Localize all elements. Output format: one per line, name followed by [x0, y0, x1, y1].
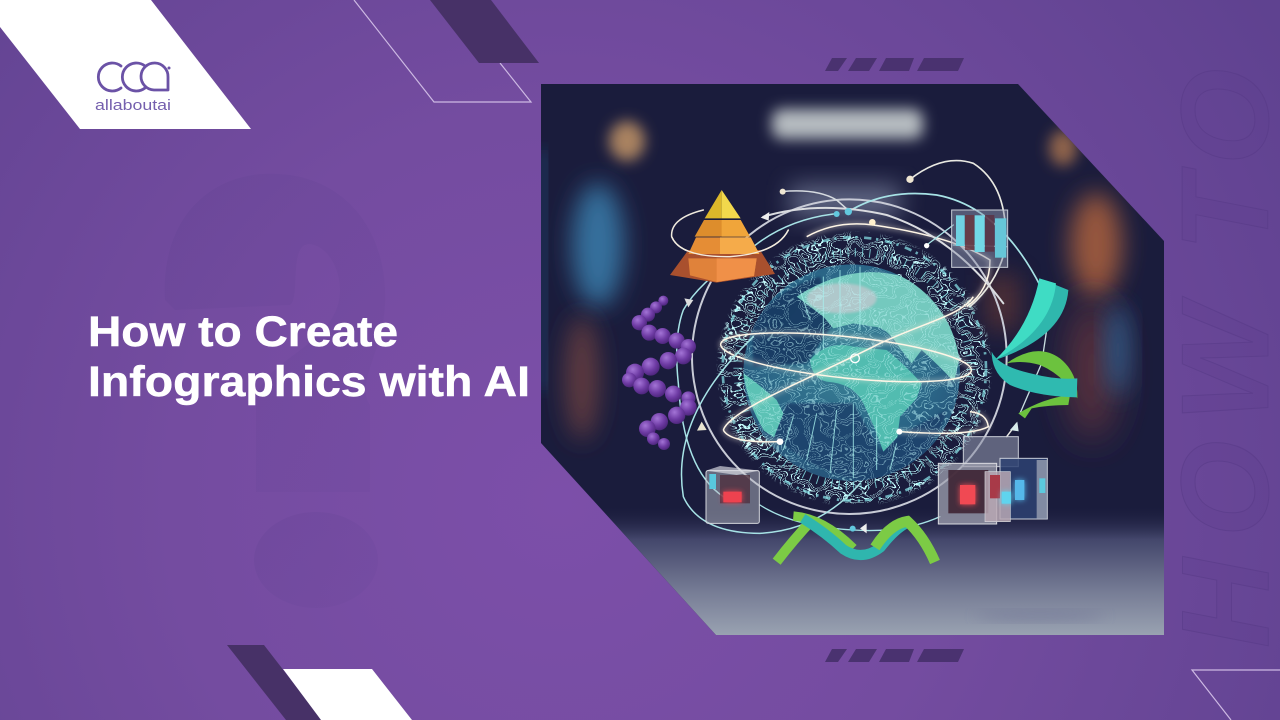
- arc nodes and arrowheads: [684, 176, 1019, 533]
- icon: glass cube cluster: [938, 437, 1047, 524]
- logo badge: [0, 0, 251, 129]
- data flow arcs: [672, 161, 1047, 533]
- globe sphere: [743, 263, 963, 483]
- background question mark: [165, 174, 385, 608]
- continent: Africa: [810, 345, 922, 452]
- bottom white parallelogram: [283, 669, 412, 720]
- logo mark: [98, 63, 170, 91]
- title line 1: How to Create: [88, 308, 398, 356]
- icon: teal and green ribbons: [992, 278, 1077, 418]
- top outline parallelogram: [354, 0, 531, 102]
- polar haze: [807, 283, 877, 313]
- bottom right outline: [1192, 670, 1280, 720]
- glowing orbit lines: [719, 224, 990, 442]
- title line 2: Infographics with AI: [88, 358, 530, 406]
- continent: South America: [743, 373, 783, 437]
- icon: double helix ribbon: [777, 516, 935, 562]
- photo panel: [541, 84, 1165, 636]
- icon: purple molecule chain: [622, 296, 697, 450]
- title: [88, 308, 530, 406]
- icon: red glass cube: [706, 466, 759, 523]
- blurred room backdrop: [541, 84, 1165, 636]
- icon: pyramid: [670, 190, 775, 283]
- big orbit ring: [692, 199, 1007, 514]
- particle shell: [710, 227, 997, 513]
- top dark parallelogram: [430, 0, 539, 63]
- bottom dash marks: [825, 649, 964, 662]
- globe illustration: [622, 161, 1077, 562]
- logo wordmark: allaboutai: [95, 97, 171, 114]
- continent: Eurasia: [797, 272, 960, 382]
- top dash marks: [825, 58, 964, 71]
- bottom dark parallelogram: [227, 645, 322, 720]
- icon: top glass cube: [952, 210, 1008, 267]
